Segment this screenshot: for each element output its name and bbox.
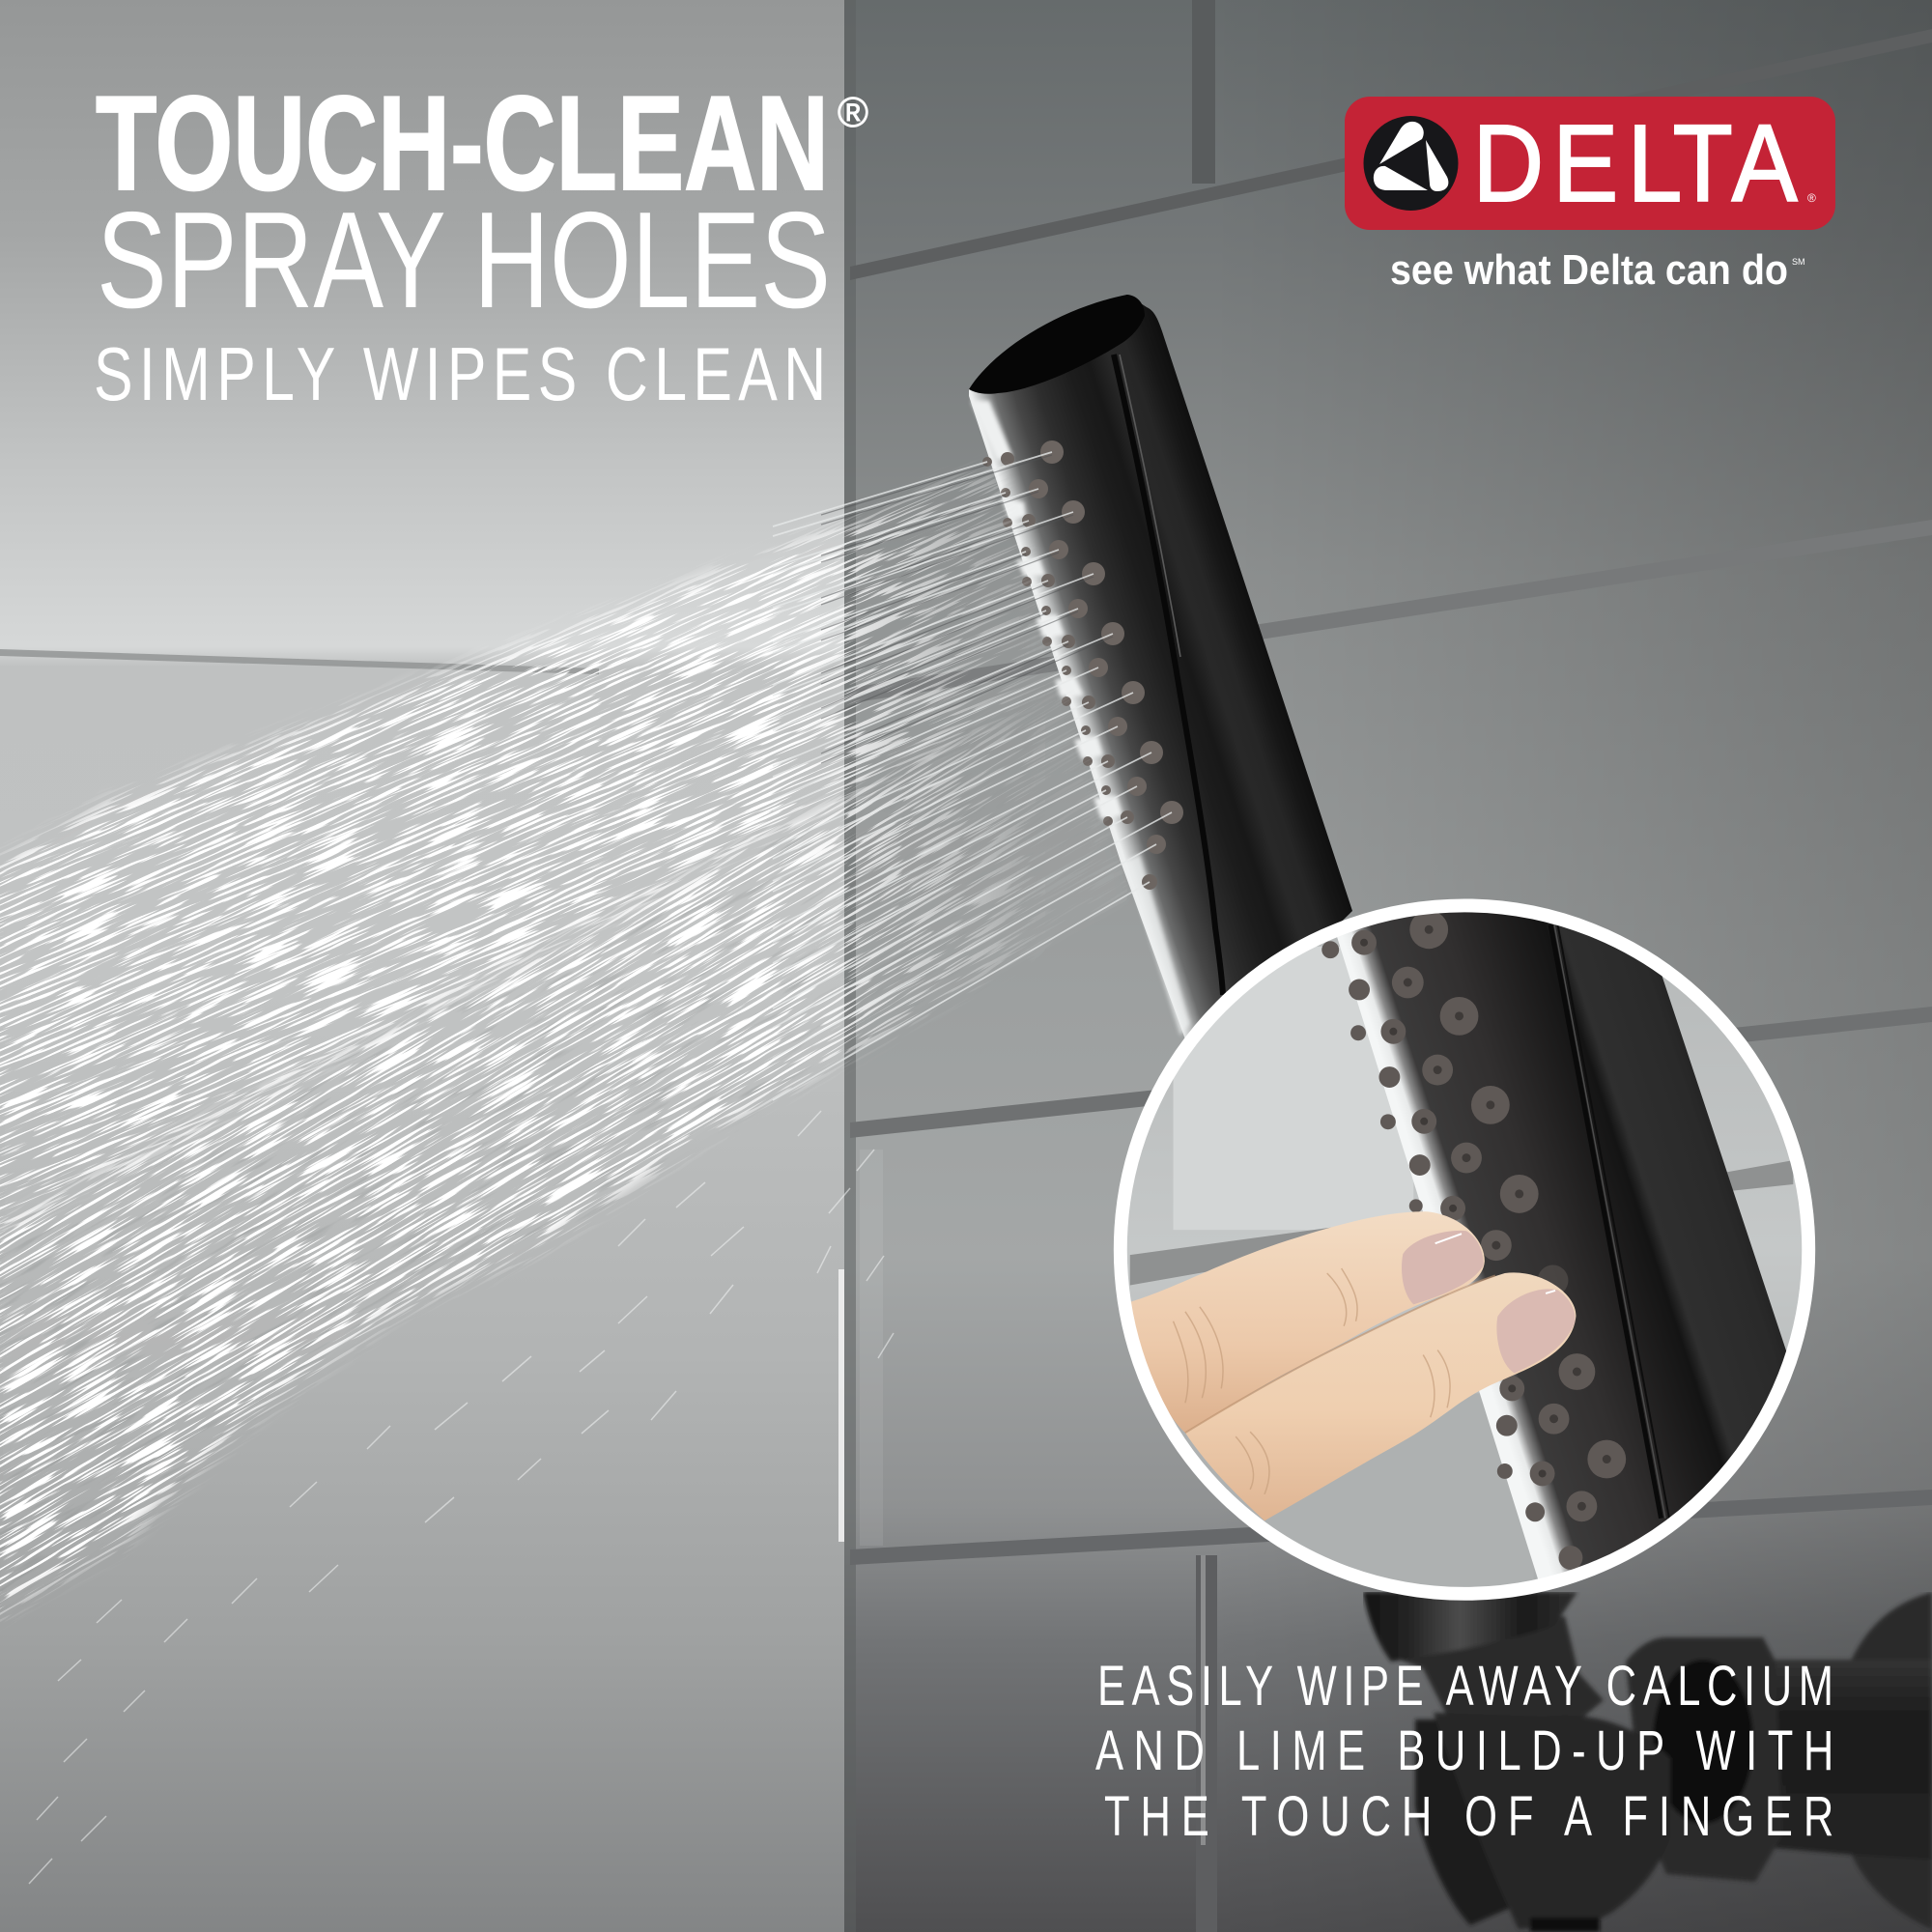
dark jet edges	[821, 455, 1113, 763]
caption: touch of a finger: THE TOUCH OF A FINGER	[1104, 1785, 1833, 1847]
white triangle emblem	[1374, 122, 1448, 191]
mount back plate	[1415, 1719, 1515, 1925]
body	[969, 295, 1352, 1039]
heading: SPRAY HOLES: SPRAY HOLES	[97, 184, 831, 337]
inset nozzles	[1321, 910, 1626, 1570]
subheading: SIMPLY WIPES CLEAN: SIMPLY WIPES CLEAN	[94, 332, 826, 416]
skin creases	[1174, 1268, 1495, 1494]
water spray	[0, 351, 1172, 1884]
wordmark: DELTA	[1473, 102, 1798, 224]
inset seam	[1550, 924, 1669, 1519]
wall flange	[1852, 1592, 1932, 1929]
inset hand spray	[1337, 912, 1786, 1578]
open end	[969, 295, 1145, 394]
seam	[1114, 355, 1223, 995]
lower fingernail	[1496, 1289, 1576, 1373]
lower finger	[1185, 1272, 1576, 1520]
wordmark registered mark: ®	[1807, 191, 1816, 205]
shower wall mount and hose	[1363, 1592, 1932, 1932]
caption: touch of a finger: AND LIME BUILD-UP WITH	[1095, 1719, 1833, 1781]
chrome highlights	[971, 401, 1190, 1036]
caption: touch of a finger	[1095, 1655, 1833, 1847]
arm	[1741, 1660, 1932, 1860]
collar	[1363, 1592, 1577, 1662]
upper finger	[1130, 1211, 1485, 1433]
mount body	[1434, 1713, 1670, 1929]
swivel ring	[1626, 1637, 1782, 1882]
neck	[1391, 1616, 1604, 1748]
red badge	[1345, 97, 1835, 230]
black circle emblem	[1364, 116, 1459, 211]
caption: touch of a finger: EASILY WIPE AWAY CALCIUM	[1097, 1655, 1833, 1717]
Delta logo badge	[1345, 97, 1835, 230]
jets leaving nozzles	[773, 452, 1172, 1100]
lower streaks	[0, 706, 1045, 1622]
inset nozzle holes	[1360, 925, 1611, 1511]
spray nozzles	[982, 440, 1183, 890]
service mark: SM	[1792, 257, 1804, 267]
inset background tile	[1126, 937, 1803, 1580]
spray haze	[0, 464, 1130, 1623]
upper streaks	[0, 468, 1045, 1236]
hose	[1530, 1918, 1600, 1932]
nail glints	[1435, 1234, 1555, 1293]
stray droplets	[29, 1111, 894, 1884]
swivel centre	[1653, 1660, 1753, 1824]
tagline: see what Delta can do	[1390, 246, 1788, 294]
inset white ring	[1121, 905, 1808, 1594]
registered mark: ®	[838, 89, 868, 136]
shower hand spray body	[969, 295, 1352, 1039]
upper fingernail	[1402, 1231, 1484, 1304]
title: TOUCH-CLEAN: TOUCH-CLEAN	[96, 69, 829, 218]
magnified inset: finger wiping nozzles	[1113, 898, 1816, 1601]
streak shadows	[0, 837, 844, 1590]
